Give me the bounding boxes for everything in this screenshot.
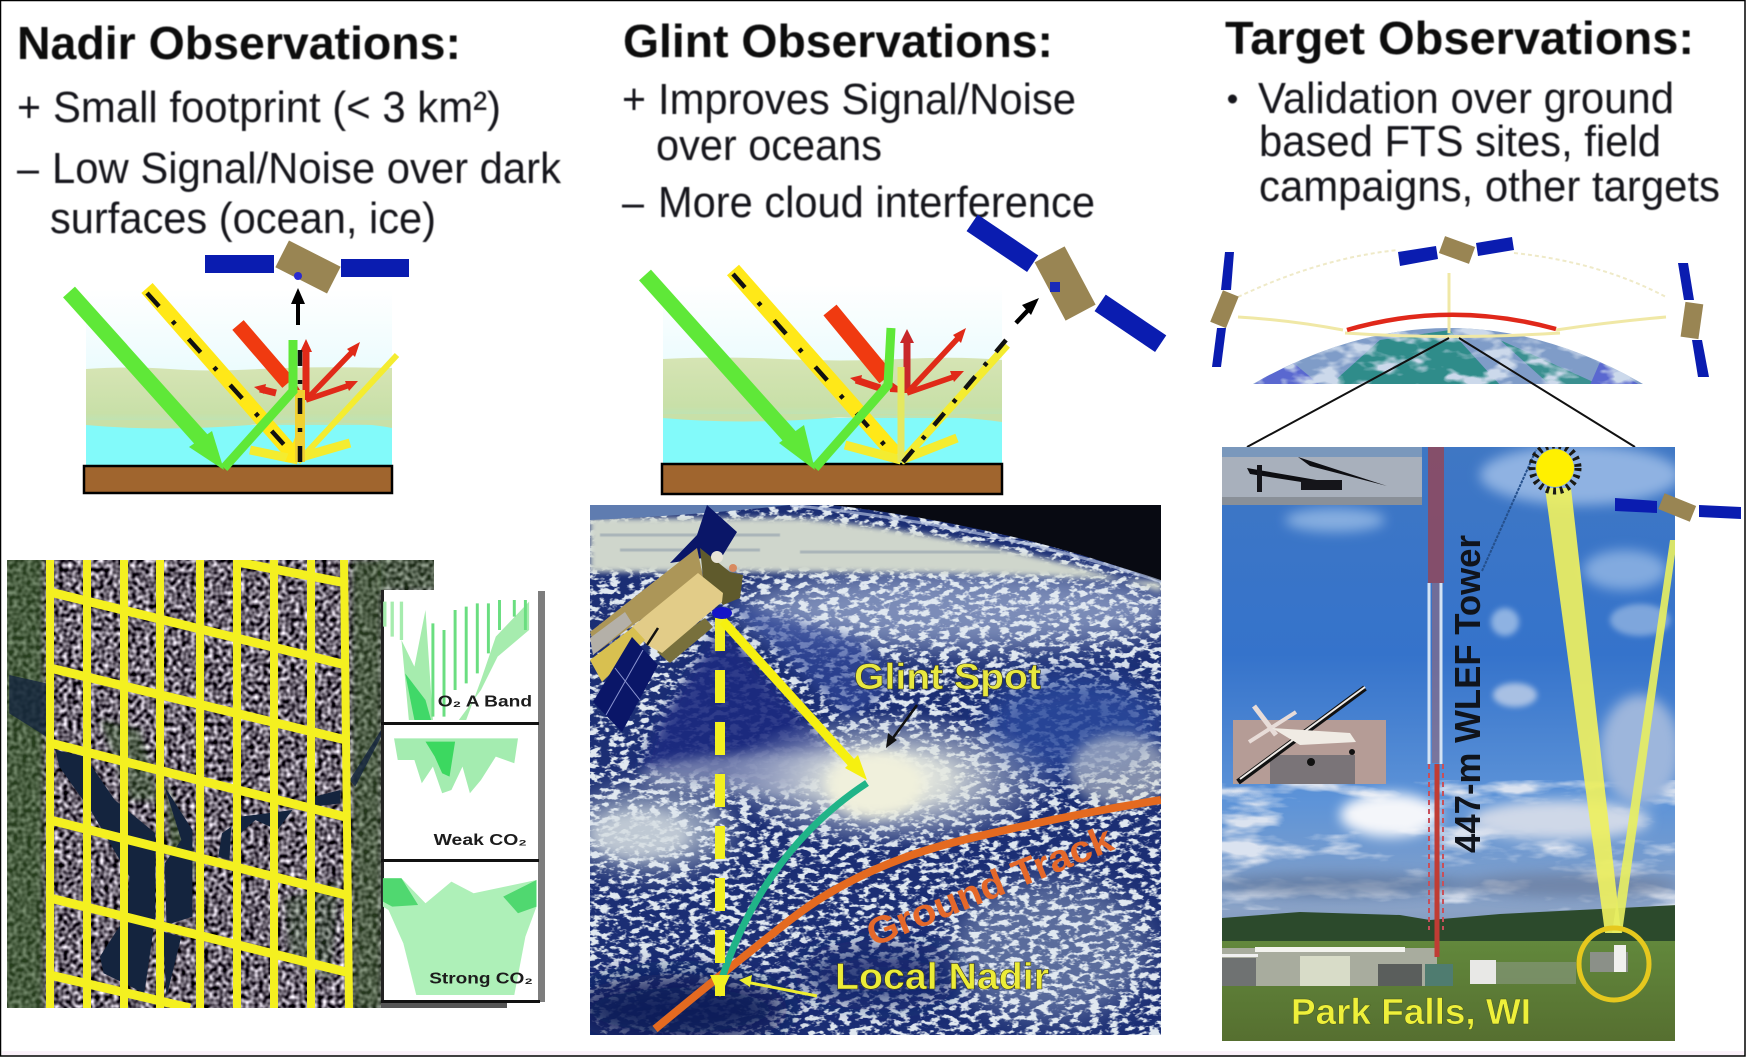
text block: nadir pros and cons: – <box>17 144 39 193</box>
beam: site to satellite <box>1612 540 1677 933</box>
spectrum: weak CO2: Weak CO₂ <box>434 831 527 849</box>
spectrum: strong CO2: Strong CO₂ <box>429 969 533 987</box>
text block: target notes <box>1228 74 1720 211</box>
line to glint spot <box>723 621 867 780</box>
image: city map with footprint grid <box>2 555 440 1015</box>
treeline <box>1222 905 1675 941</box>
icon: large satellite <box>590 505 743 732</box>
spectrum: strong CO2 <box>383 878 536 995</box>
panel: nadir observations <box>2 17 562 1015</box>
text block: glint pros and cons: + <box>622 75 646 124</box>
text block: nadir pros and cons <box>17 83 562 243</box>
diagram: glint atmosphere paths <box>645 270 1039 494</box>
text block: glint pros and cons: Improves Signal/Noise <box>658 75 1076 124</box>
label: tower height: 447-m WLEF Tower <box>1447 535 1488 853</box>
text block: glint pros and cons <box>622 75 1095 227</box>
park areas on the map <box>2 555 440 1015</box>
heading: nadir: Nadir Observations: <box>17 17 461 69</box>
text block: glint pros and cons: over oceans <box>656 121 882 170</box>
text block: glint pros and cons: – <box>622 178 644 227</box>
panel: glint observations <box>570 15 1180 1046</box>
spectrum: O2 A band <box>385 600 532 720</box>
text block: nadir pros and cons: Small footprint (< 3 km²) <box>53 83 501 132</box>
clouds <box>1210 445 1680 910</box>
grass <box>1222 941 1675 1041</box>
label: park falls: Park Falls, WI <box>1291 991 1531 1032</box>
cloud tops over ocean <box>570 505 1180 1046</box>
icon: right satellite <box>1678 263 1709 377</box>
zoom lines <box>1247 338 1635 447</box>
earth dome <box>1253 325 1643 385</box>
label: ground track: Ground Track <box>861 818 1120 955</box>
icon: top satellite <box>1398 236 1514 266</box>
spectrum: O2 A band: O₂ A Band <box>438 692 532 710</box>
text block: target notes: based FTS sites, field <box>1259 117 1661 166</box>
panel: target observations <box>1210 12 1741 1041</box>
label: glint spot: Glint Spot <box>854 656 1041 697</box>
orbit arc <box>1238 250 1666 297</box>
dark ocean below the satellite <box>640 625 840 790</box>
glint path curve <box>722 783 867 978</box>
river on the map <box>9 675 381 997</box>
text block: nadir pros and cons: surfaces (ocean, ice) <box>50 194 436 243</box>
icon: glint satellite <box>967 215 1166 352</box>
inset: aircraft in flight <box>1222 447 1422 505</box>
image: Park Falls site photo <box>1210 445 1741 1041</box>
chart: absorption spectra <box>381 590 545 1008</box>
buildings <box>1222 947 1576 986</box>
footprint grid <box>50 560 349 1008</box>
icon: nadir satellite <box>205 240 409 294</box>
spectrum: weak CO2 <box>394 738 527 849</box>
pointer to glint spot <box>886 705 917 748</box>
text block: nadir pros and cons: Low Signal/Noise over dark <box>52 144 562 193</box>
ground track <box>655 800 1161 1029</box>
label: local nadir: Local Nadir <box>835 956 1049 997</box>
nadir dashed line <box>715 618 725 996</box>
text block: nadir pros and cons: + <box>17 83 41 132</box>
pointer to local nadir <box>739 975 817 996</box>
inset: twin-engine aircraft <box>1233 687 1386 784</box>
icon: sun <box>1532 445 1578 491</box>
image: earth view with glint spot <box>570 500 1180 1046</box>
pale cloud bank along the top <box>590 518 1161 592</box>
text block: target notes: Validation over ground <box>1258 74 1674 123</box>
target arc <box>1347 315 1556 330</box>
heading: target: Target Observations: <box>1225 12 1694 64</box>
leader line to tower label <box>1482 450 1536 571</box>
heading: glint: Glint Observations: <box>623 15 1053 67</box>
marker: target site <box>1579 928 1649 1000</box>
tower <box>1428 447 1444 957</box>
beam: sun to site <box>1545 488 1621 933</box>
icon: left satellite <box>1210 252 1239 367</box>
icon: site satellite <box>1615 493 1741 522</box>
text block: glint pros and cons: More cloud interference <box>658 178 1095 227</box>
diagram: nadir atmosphere paths <box>69 288 397 493</box>
text block: target notes: campaigns, other targets <box>1259 162 1720 211</box>
space above the earth limb <box>832 505 1161 582</box>
diagram: orbit and earth dome <box>1210 236 1709 447</box>
viewing lines <box>1238 273 1666 336</box>
